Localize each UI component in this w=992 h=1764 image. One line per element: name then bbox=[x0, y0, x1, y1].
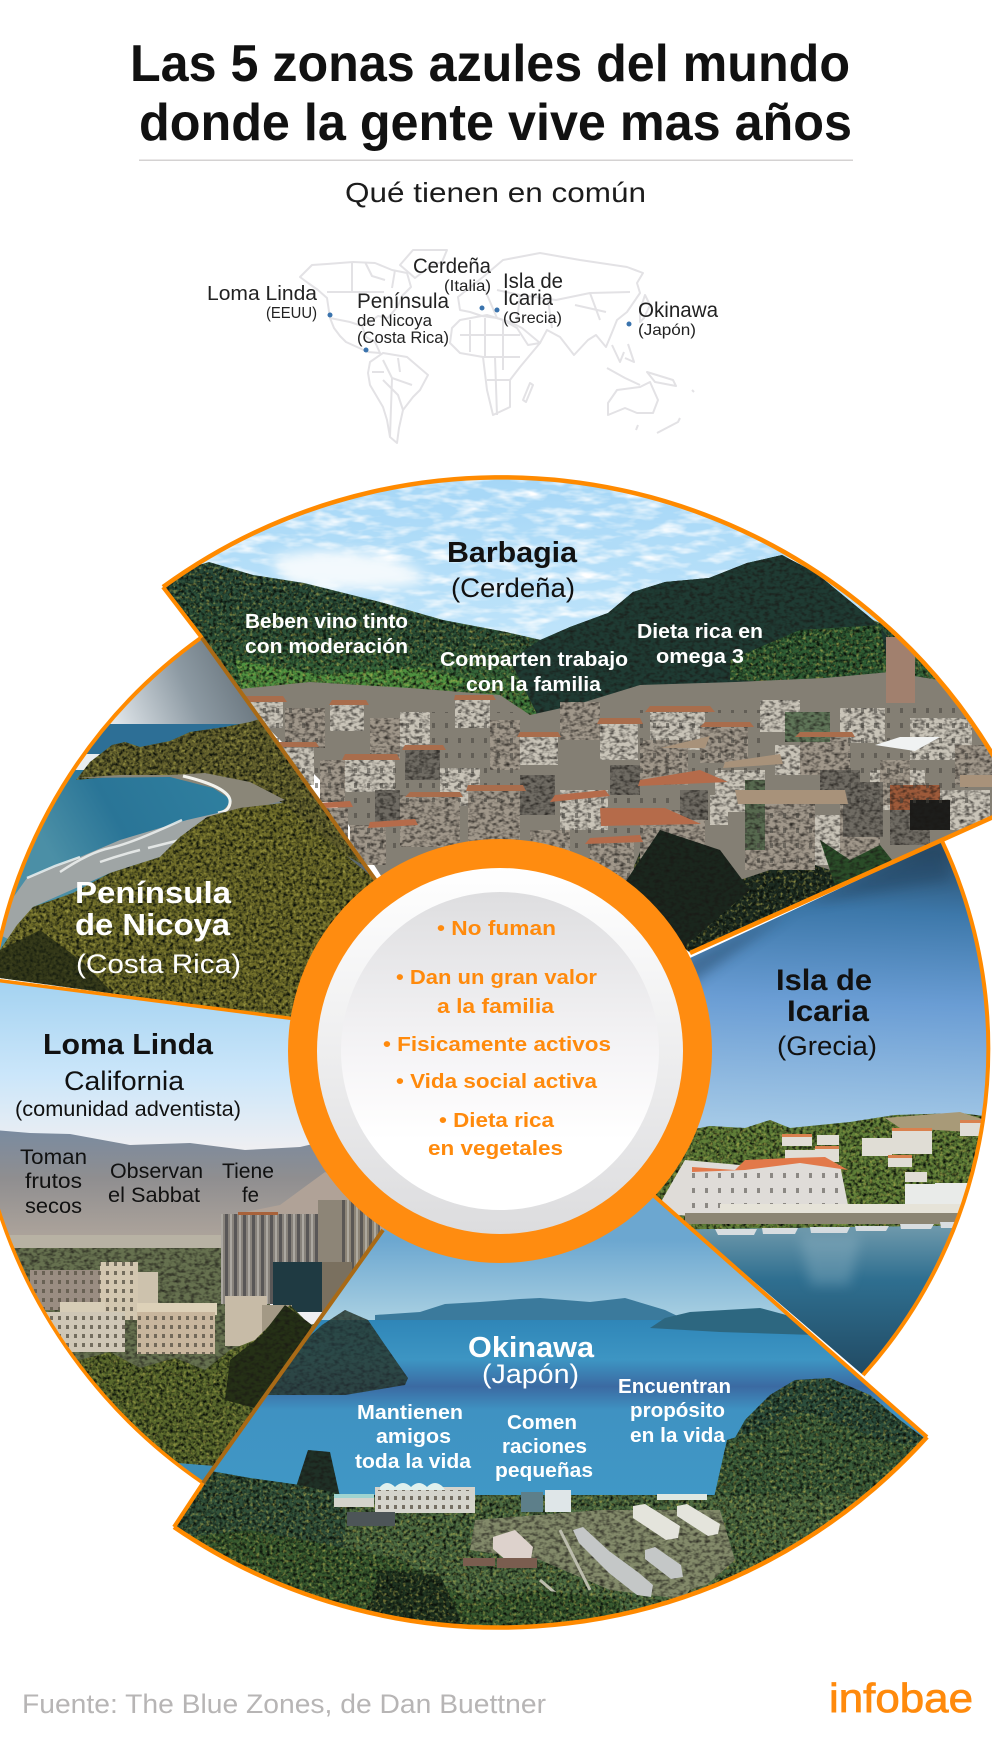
center circle bbox=[288, 839, 712, 1263]
world map bbox=[300, 250, 694, 443]
habit: work bbox=[440, 649, 628, 696]
logo: infobae: infobae bbox=[829, 1675, 973, 1721]
habit: nuts: Toman bbox=[20, 1146, 87, 1169]
label: Isla de Icaria bbox=[503, 270, 563, 327]
text: Nicoya: Península bbox=[75, 875, 232, 910]
habit: omega bbox=[637, 621, 763, 668]
map dots bbox=[328, 306, 632, 352]
habit: omega: omega 3 bbox=[656, 646, 744, 668]
title: donde la gente vive mas años bbox=[139, 94, 852, 152]
habit: sabbath bbox=[108, 1160, 203, 1207]
text: Barbagia: (Cerdeña) bbox=[451, 573, 575, 603]
habit: friends: amigos bbox=[376, 1426, 451, 1448]
label: Loma Linda bbox=[207, 282, 318, 322]
habit: nuts bbox=[20, 1146, 87, 1218]
title: Las 5 zonas azules del mundo bbox=[130, 35, 850, 93]
label: Isla de Icaria: (Grecia) bbox=[503, 310, 562, 327]
list: common habits bbox=[383, 917, 611, 1160]
label: Cerdeña bbox=[413, 255, 491, 295]
label: Okinawa: Okinawa bbox=[638, 299, 718, 322]
label: Península de Nicoya: (Costa Rica) bbox=[357, 329, 449, 347]
source: Fuente: The Blue Zones, de Dan Buettner bbox=[22, 1689, 546, 1719]
text: Nicoya bbox=[75, 875, 241, 979]
habit: small portions: raciones bbox=[502, 1436, 587, 1458]
label: Península de Nicoya: Península bbox=[357, 290, 449, 313]
label: Loma Linda: Loma Linda bbox=[207, 282, 318, 305]
text: Isla de Icaria: Icaria bbox=[787, 995, 869, 1028]
subtitle: Qué tienen en común bbox=[345, 177, 646, 208]
okinawa and loma edge strokes bbox=[174, 1195, 927, 1627]
list: common habits: • Dieta rica bbox=[439, 1109, 555, 1132]
habit: purpose: Encuentran bbox=[618, 1376, 731, 1398]
label: Cerdeña: Cerdeña bbox=[413, 255, 491, 278]
habit: small portions bbox=[495, 1412, 593, 1482]
list: common habits: • Fisicamente activos bbox=[383, 1033, 611, 1056]
habit: friends: Mantienen bbox=[357, 1402, 463, 1424]
habit: small portions: Comen bbox=[507, 1412, 577, 1434]
habit: friends bbox=[355, 1402, 472, 1473]
text: Loma Linda: (comunidad adventista) bbox=[15, 1098, 241, 1121]
habit: purpose: propósito bbox=[630, 1400, 725, 1422]
text: Loma Linda: California bbox=[64, 1066, 185, 1096]
list: common habits: • Dan un gran valor bbox=[396, 966, 597, 989]
habit: faith: Tiene bbox=[222, 1160, 274, 1183]
list: common habits: a la familia bbox=[437, 995, 555, 1018]
habit: nuts: frutos bbox=[25, 1170, 82, 1193]
text: Nicoya: de Nicoya bbox=[75, 907, 231, 942]
text: Isla de Icaria: (Grecia) bbox=[777, 1031, 877, 1061]
habit: sabbath: el Sabbat bbox=[108, 1184, 200, 1207]
list: common habits: • No fuman bbox=[437, 917, 556, 940]
habit: sabbath: Observan bbox=[110, 1160, 203, 1183]
label: Isla de Icaria: Icaria bbox=[503, 287, 553, 310]
panel: Barbagia bbox=[150, 470, 992, 960]
text: Nicoya: (Costa Rica) bbox=[76, 949, 241, 979]
label: Okinawa bbox=[638, 299, 718, 339]
text: Okinawa bbox=[355, 1332, 731, 1482]
habit: work: Comparten trabajo bbox=[440, 649, 628, 671]
label: Isla de Icaria: Isla de bbox=[503, 270, 563, 293]
label: Cerdeña: (Italia) bbox=[444, 278, 491, 295]
text: Okinawa: (Japón) bbox=[482, 1359, 579, 1389]
habit: faith bbox=[222, 1160, 274, 1207]
label: Península de Nicoya bbox=[357, 290, 449, 347]
text: Barbagia bbox=[245, 537, 763, 696]
habit: omega: Dieta rica en bbox=[637, 621, 763, 643]
text: Isla de Icaria: Isla de bbox=[776, 964, 872, 997]
label: Península de Nicoya: de Nicoya bbox=[357, 312, 433, 330]
habit: nuts: secos bbox=[25, 1195, 82, 1218]
label: Loma Linda: (EEUU) bbox=[266, 305, 317, 322]
habit: wine: con moderación bbox=[245, 636, 408, 658]
panel: Okinawa bbox=[176, 1198, 924, 1626]
text: Isla de Icaria bbox=[776, 964, 877, 1061]
list: common habits: en vegetales bbox=[428, 1137, 563, 1160]
panel: Loma Linda bbox=[0, 979, 384, 1484]
habit: wine bbox=[245, 611, 408, 658]
habit: purpose bbox=[618, 1376, 731, 1447]
title bbox=[130, 35, 852, 152]
habit: small portions: pequeñas bbox=[495, 1460, 593, 1482]
list: common habits: • Vida social activa bbox=[396, 1070, 598, 1093]
map labels and dots bbox=[207, 255, 718, 352]
panel: Isla de Icaria bbox=[640, 830, 992, 1385]
habit: purpose: en la vida bbox=[630, 1425, 726, 1447]
text: Loma Linda: Loma Linda bbox=[43, 1029, 214, 1061]
text: Okinawa: Okinawa bbox=[468, 1332, 595, 1364]
habit: work: con la familia bbox=[466, 674, 602, 696]
habit: friends: toda la vida bbox=[355, 1451, 472, 1473]
text: Barbagia: Barbagia bbox=[447, 537, 578, 569]
panel: Nicoya bbox=[0, 630, 390, 1030]
habit: faith: fe bbox=[242, 1184, 259, 1207]
text: Loma Linda bbox=[15, 1029, 274, 1218]
label: Okinawa: (Japón) bbox=[638, 322, 696, 339]
habit: wine: Beben vino tinto bbox=[245, 611, 408, 633]
